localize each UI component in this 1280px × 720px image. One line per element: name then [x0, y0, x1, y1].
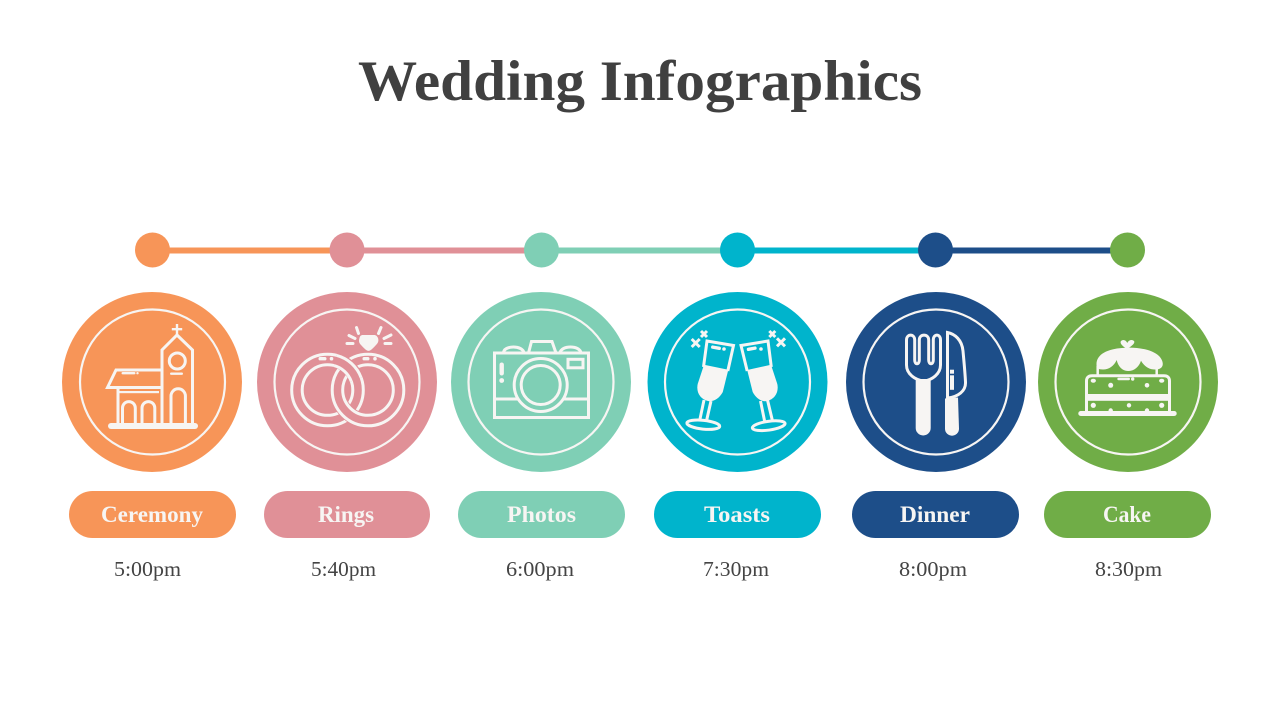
icon: church: [108, 324, 198, 429]
icon: fork and knife: [906, 332, 966, 436]
time: photos: 6:00pm: [506, 557, 574, 581]
label: dinner: [852, 491, 1019, 538]
label: rings: [264, 491, 430, 538]
panel: rings: [257, 292, 437, 472]
timeline: [135, 232, 1145, 268]
label: toasts: [654, 491, 821, 538]
time: ceremony: 5:00pm: [114, 557, 181, 581]
right glass: [741, 341, 786, 432]
label: cake: Cake: [1103, 502, 1151, 527]
label: ceremony: Ceremony: [101, 502, 203, 527]
icon: rings: [292, 328, 404, 426]
icon: cake: [1078, 340, 1177, 416]
time: dinner: 8:00pm: [899, 557, 967, 581]
label: toasts: Toasts: [704, 502, 770, 527]
label: ceremony: [69, 491, 236, 538]
time: rings: 5:40pm: [311, 557, 376, 581]
panel: ceremony: [62, 292, 242, 472]
panel: toasts: [648, 292, 828, 472]
time: cake: 8:30pm: [1095, 557, 1162, 581]
panel: cake: [1038, 292, 1218, 472]
left glass: [686, 341, 734, 431]
label: cake: [1044, 491, 1211, 538]
icon: champagne glasses: [686, 331, 786, 432]
label: photos: [458, 491, 625, 538]
panel: photos: [451, 292, 631, 472]
icon: camera: [494, 342, 588, 418]
label: dinner: Dinner: [900, 502, 970, 527]
label: rings: Rings: [318, 502, 374, 527]
title: Wedding Infographics: [358, 50, 922, 113]
panel: dinner: [846, 292, 1026, 472]
time: toasts: 7:30pm: [703, 557, 769, 581]
label: photos: Photos: [507, 502, 576, 527]
